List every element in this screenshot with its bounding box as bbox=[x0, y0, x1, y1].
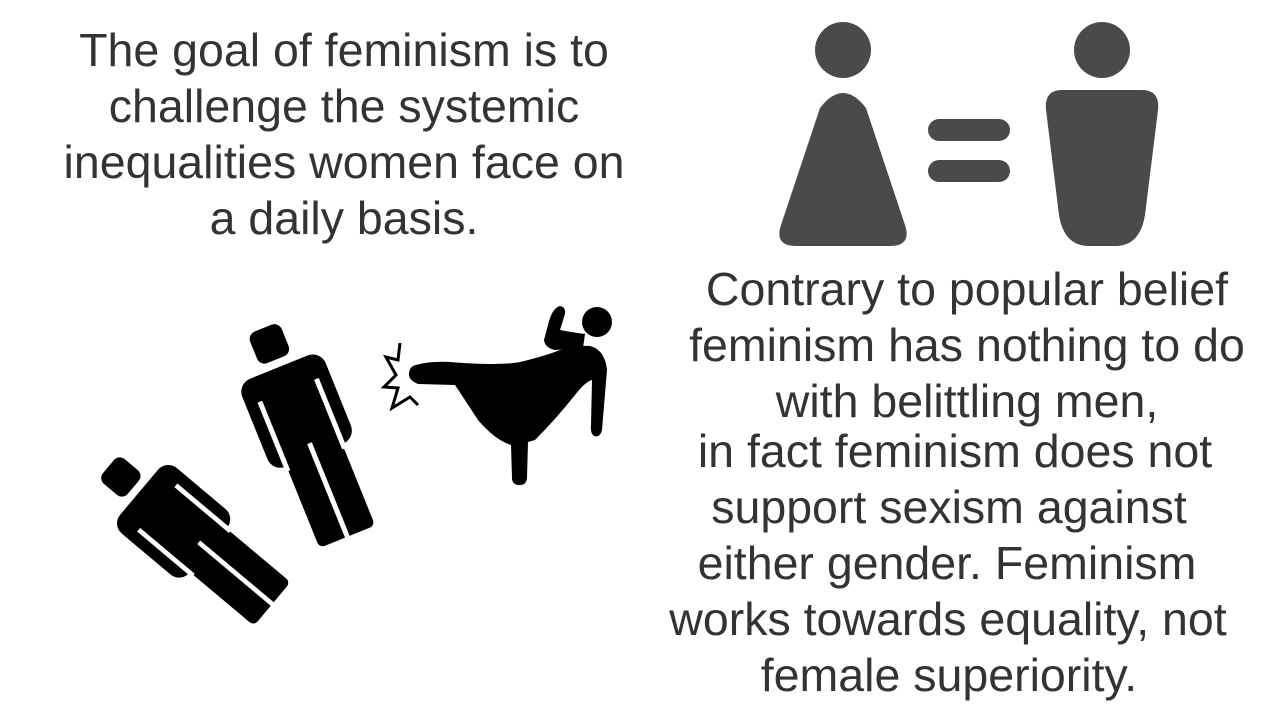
text block: contrary to popular belief: support sexism against bbox=[711, 481, 1187, 533]
icon: kicking figure bbox=[409, 306, 612, 485]
heading: goal of feminism bbox=[64, 24, 624, 244]
text block: contrary to popular belief: in fact feminism does not bbox=[698, 425, 1212, 477]
text block: contrary to popular belief: either gender. Feminism bbox=[698, 537, 1196, 589]
icon: standing man bbox=[221, 311, 391, 557]
text block: contrary to popular belief bbox=[668, 263, 1245, 701]
text block: contrary to popular belief: feminism has nothing to do bbox=[689, 319, 1245, 371]
heading: goal of feminism: The goal of feminism is to bbox=[79, 24, 609, 76]
icon: lying man bbox=[81, 434, 303, 639]
text block: contrary to popular belief: with belittling men, bbox=[775, 375, 1158, 427]
text block: contrary to popular belief: Contrary to popular belief bbox=[706, 263, 1228, 315]
icon: impact spark bbox=[384, 343, 418, 408]
heading: goal of feminism: inequalities women face on bbox=[64, 136, 624, 188]
heading: goal of feminism: challenge the systemic bbox=[109, 80, 579, 132]
text block: contrary to popular belief: female superiority. bbox=[761, 649, 1137, 701]
icon: equality figures bbox=[779, 22, 1158, 246]
heading: goal of feminism: a daily basis. bbox=[210, 192, 478, 244]
icon: kick illustration bbox=[81, 306, 612, 639]
text block: contrary to popular belief: works towards equality, not bbox=[668, 593, 1227, 645]
